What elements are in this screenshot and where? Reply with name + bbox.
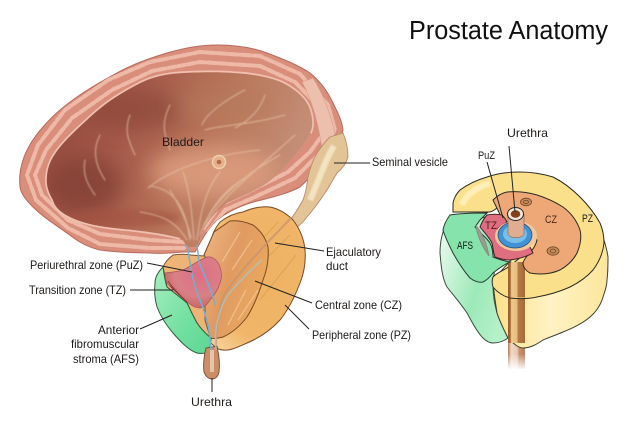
label: periurethral zone: Periurethral zone (PuZ) xyxy=(30,258,143,272)
zone label: CZ: CZ xyxy=(545,214,557,226)
label: ejaculatory duct: Ejaculatory xyxy=(326,245,381,259)
label: anterior fibromuscular stroma xyxy=(71,315,172,366)
label: bladder: Bladder xyxy=(162,135,204,149)
ureteral orifice xyxy=(212,155,226,169)
urethra rod lower end xyxy=(507,340,526,370)
label: anterior fibromuscular stroma: Anterior xyxy=(98,323,139,337)
label: transition zone: Transition zone (TZ) xyxy=(29,283,126,297)
label: central zone xyxy=(255,281,402,312)
transition zone section xyxy=(480,214,533,260)
label: seminal vesicle: Seminal vesicle xyxy=(372,155,448,169)
anterior fibromuscular stroma section xyxy=(443,213,510,282)
central zone xyxy=(493,192,581,274)
label: cross-section urethra xyxy=(507,126,548,212)
transition and periurethral zones xyxy=(165,257,222,308)
label: cross-section urethra: Urethra xyxy=(507,126,548,140)
green lower body xyxy=(440,215,508,343)
label: urethra xyxy=(191,378,232,409)
ejaculatory duct band xyxy=(216,218,291,345)
urethra rod inside top slab xyxy=(508,262,525,298)
grey wedge xyxy=(476,226,489,256)
urethra tube xyxy=(508,208,524,238)
peripheral zone top slab xyxy=(453,172,604,299)
prostate: peripheral zone xyxy=(198,207,305,350)
label: peripheral zone xyxy=(285,305,411,342)
ejaculatory duct openings xyxy=(520,198,559,255)
urethra rod through body xyxy=(508,297,525,343)
title: Prostate Anatomy xyxy=(409,17,608,45)
anterior fibromuscular stroma xyxy=(155,267,211,353)
illustration: side view of bladder and prostate xyxy=(20,45,348,379)
label: ejaculatory duct xyxy=(275,243,381,273)
label: peripheral zone: Peripheral zone (PZ) xyxy=(312,328,411,342)
illustration: cross-section zones xyxy=(440,126,608,370)
prostate: central zone xyxy=(196,221,268,338)
zone label: TZ: TZ xyxy=(485,220,497,232)
bladder cavity xyxy=(46,72,312,247)
zone label: AFS: AFS xyxy=(457,240,473,252)
bladder wall xyxy=(20,45,343,253)
label: ejaculatory duct: duct xyxy=(326,259,349,273)
seminal vesicle xyxy=(290,78,348,227)
label: anterior fibromuscular stroma: stroma (AFS) xyxy=(73,352,139,366)
label: cross-section PuZ: PuZ xyxy=(478,150,495,162)
urethra tip xyxy=(204,346,219,379)
urethra and duct blue lines xyxy=(187,245,262,350)
label: urethra: Urethra xyxy=(191,395,232,409)
anterior tan region xyxy=(163,254,211,340)
yellow lower body xyxy=(493,237,608,348)
label: central zone: Central zone (CZ) xyxy=(315,298,402,312)
periurethral zone xyxy=(495,221,537,251)
label: anterior fibromuscular stroma: fibromuscular xyxy=(71,337,139,351)
zone label: PZ: PZ xyxy=(582,213,593,225)
label: cross-section PuZ xyxy=(478,150,503,218)
label: seminal vesicle xyxy=(334,155,448,169)
